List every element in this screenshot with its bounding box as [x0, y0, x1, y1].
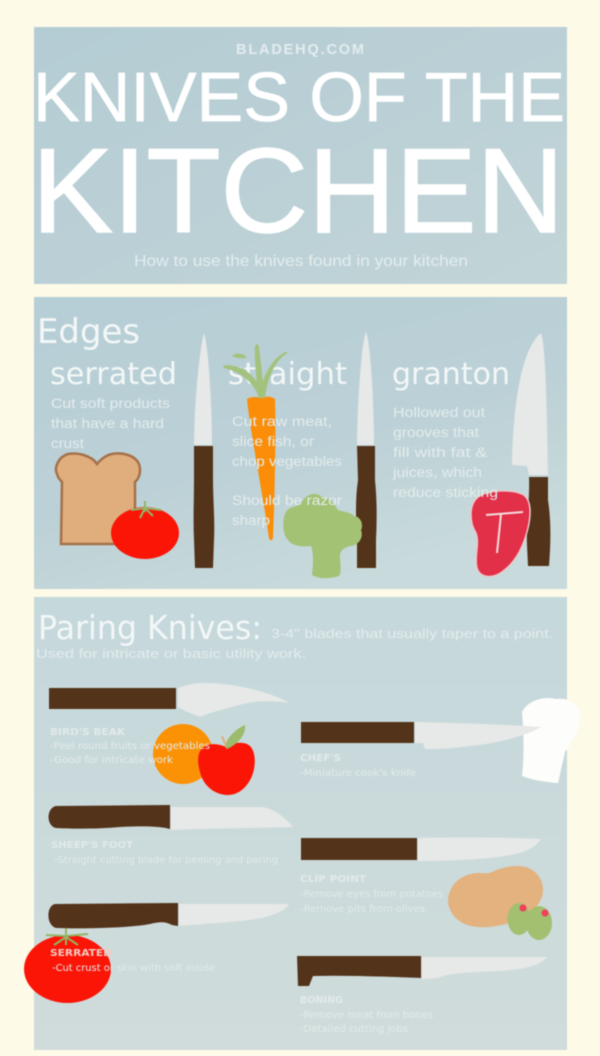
text: straight description: sharp	[232, 513, 270, 528]
text: serrated description: crust	[51, 436, 84, 451]
icon: olives	[508, 903, 552, 940]
icon: straight knife	[356, 332, 377, 568]
icon: broccoli	[283, 494, 362, 578]
text: paring intro: Used for intricate or basic utility work.	[36, 647, 306, 661]
icon: apple	[198, 725, 255, 795]
text: chef's: -Miniature cook's knife	[300, 768, 416, 779]
text: chef's: CHEF'S	[300, 753, 341, 764]
icon: carrot leaves	[223, 344, 287, 398]
knife: sheep's foot	[48, 805, 293, 830]
heading: serrated: serrated	[50, 357, 177, 392]
text: granton description: reduce sticking	[393, 485, 498, 500]
text: granton description: grooves that	[393, 425, 479, 440]
title line two: KITCHEN	[32, 124, 564, 258]
text: serrated paring	[50, 948, 215, 974]
text: granton description: fill with fat &	[393, 445, 487, 460]
icon: tomato large	[24, 925, 111, 1003]
title line one: KNIVES OF THE	[33, 58, 565, 136]
icon: orange	[153, 724, 213, 784]
knife: clip point	[301, 837, 541, 861]
text: bird's beak: BIRD'S BEAK	[50, 727, 126, 738]
subtitle: How to use the knives found in your kitchen	[134, 253, 468, 270]
text: bird's beak	[50, 727, 210, 766]
panel: header	[32, 27, 567, 284]
text: serrated description: Cut soft products	[51, 396, 170, 411]
text: straight description	[232, 414, 343, 528]
knife: bird's beak	[49, 683, 290, 717]
text: clip point: -Remove pits from olives	[300, 904, 425, 915]
text: paring intro: 3-4" blades that usually taper to a point.	[271, 627, 553, 641]
text: granton description: juices, which	[392, 465, 482, 480]
panel: edges	[34, 297, 567, 589]
knife: chef's	[301, 722, 541, 749]
text: serrated paring: -Cut crust or skin with soft inside	[52, 963, 215, 974]
knife: boning	[297, 956, 547, 986]
icon: chef hat	[522, 698, 580, 783]
icon: serrated knife	[194, 333, 214, 568]
text: sheep's foot: -Straight cutting blade for peeling and paring	[54, 855, 278, 866]
icon: steak	[471, 491, 530, 577]
heading: straight: straight	[228, 357, 347, 392]
knife: serrated	[48, 903, 289, 928]
icon: carrot body	[247, 397, 275, 540]
text: boning: -Remove meat from bones	[300, 1010, 433, 1021]
text: boning: -Detailed cutting jobs	[300, 1024, 408, 1035]
text: granton description: Hollowed out	[393, 405, 485, 420]
text: clip point: -Remove eyes from potatoes	[300, 889, 443, 900]
text: boning	[300, 995, 433, 1035]
text: straight description: Should be razor	[232, 493, 343, 508]
text: straight description: slice fish, or	[232, 434, 315, 449]
site name: BLADEHQ.COM	[236, 42, 364, 58]
text: bird's beak: -Peel round fruits or vegetables	[50, 741, 210, 752]
heading: edges: Edges	[37, 312, 140, 352]
text: paring intro	[36, 627, 553, 661]
icon: bread	[56, 453, 140, 544]
heading: granton: granton	[392, 357, 510, 392]
icon: granton knife	[512, 333, 550, 566]
text: granton description	[392, 405, 498, 500]
text: bird's beak: -Good for intricate work	[50, 755, 173, 766]
text: serrated description: that have a hard	[51, 416, 164, 431]
text: straight description: chop vegetables	[232, 454, 342, 469]
icon: potato	[448, 866, 543, 927]
text: clip point	[300, 874, 443, 915]
text: straight description: Cut raw meat,	[232, 414, 332, 429]
heading: paring knives: Paring Knives:	[38, 608, 262, 647]
text: sheep's foot	[51, 840, 278, 866]
text: chef's	[300, 753, 416, 779]
icon: tomato	[111, 501, 179, 559]
text: clip point: CLIP POINT	[300, 874, 366, 885]
panel: paring knives	[24, 597, 580, 1050]
text: sheep's foot: SHEEP'S FOOT	[51, 840, 133, 851]
text: boning: BONING	[300, 995, 343, 1006]
text: serrated description	[51, 396, 170, 451]
text: serrated paring: SERRATED	[50, 948, 112, 959]
